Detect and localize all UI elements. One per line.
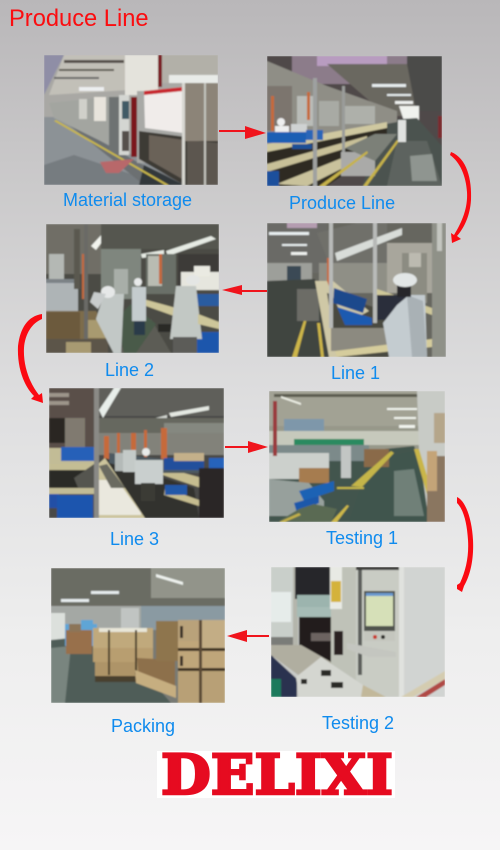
photo: produce line [267,56,442,186]
arrow: produce line to line 1 [450,152,471,243]
photo: line 3 [49,388,224,518]
arrow: line 2 to line 3 [18,314,43,403]
label: packing: Packing [111,716,175,736]
label: line 2: Line 2 [105,360,154,380]
arrow: testing 1 to testing 2 [457,497,473,592]
photo: testing 2 [271,567,445,697]
label: produce line: Produce Line [289,193,395,213]
label: line 1: Line 1 [331,363,380,383]
label: line 3: Line 3 [110,529,159,549]
photo: packing [51,568,225,703]
photo: testing 1 [269,391,445,522]
photo: line 2 [46,224,219,353]
title: Produce Line [9,6,149,32]
photo: material storage [44,55,218,185]
arrow: line 1 to line 2 [222,285,267,295]
logo: DELIXI: DELIXI [161,742,393,807]
label: testing 1: Testing 1 [326,528,398,548]
arrow: material storage to produce line [219,126,266,139]
photo: line 1 [267,223,446,357]
label: material storage: Material storage [63,190,192,210]
label: testing 2: Testing 2 [322,713,394,733]
arrow: testing 2 to packing [227,630,269,642]
arrow: line 3 to testing 1 [225,441,268,453]
